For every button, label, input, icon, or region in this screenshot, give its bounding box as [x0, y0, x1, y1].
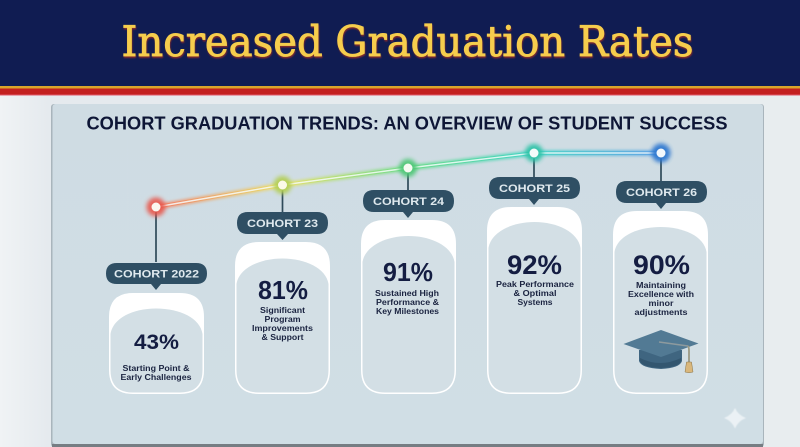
description 2022 — [120, 364, 192, 382]
description 23 — [252, 306, 314, 342]
card: cohort 25 — [487, 177, 582, 394]
header banner — [0, 0, 800, 96]
card inner 24 — [362, 236, 454, 392]
connector stems — [156, 153, 661, 262]
description 26: Excellence with — [628, 290, 694, 299]
description 25: Peak Performance — [496, 280, 575, 289]
description 23: Improvements — [252, 324, 314, 333]
description 24: Key Milestones — [376, 307, 440, 316]
card: cohort 23 — [235, 212, 330, 394]
description 23: Significant — [260, 306, 305, 315]
panel: cohort graduation trends — [51, 104, 764, 447]
description 26: minor — [648, 299, 674, 308]
value 91%: 91% — [383, 257, 433, 287]
description 24 — [375, 289, 440, 316]
icon: sparkle — [724, 408, 746, 428]
card inner 23 — [236, 258, 328, 392]
card inner 25 — [488, 222, 580, 392]
description 26 — [628, 281, 694, 317]
value 92%: 92% — [507, 250, 562, 280]
label pill 23 — [237, 212, 328, 240]
card: cohort 26 — [613, 181, 708, 394]
card shape 25 — [487, 207, 582, 394]
trend node: 23 — [274, 176, 292, 194]
description 2022: Starting Point & — [122, 364, 190, 373]
description 25 — [496, 280, 575, 307]
value 90%: 90% — [633, 250, 690, 280]
label pill 24 — [363, 190, 454, 218]
description 24: Sustained High — [375, 289, 439, 298]
panel heading: COHORT GRADUATION TRENDS: AN OVERVIEW OF STUDENT SUCCESS — [86, 112, 728, 134]
description 23: Program — [264, 315, 300, 324]
card: cohort 2022 — [106, 263, 207, 394]
value 81%: 81% — [258, 275, 308, 305]
label pill 26: COHORT 26 — [626, 187, 697, 199]
label pill 23: COHORT 23 — [247, 218, 318, 230]
trend node: 24 — [399, 159, 417, 177]
card inner 2022 — [110, 308, 202, 392]
label pill 24: COHORT 24 — [373, 196, 445, 208]
card shape 24 — [361, 220, 456, 394]
card shape 23 — [235, 242, 330, 394]
description 24: Performance & — [376, 298, 439, 307]
trend node: 26 — [652, 144, 670, 162]
description 23: & Support — [262, 333, 304, 342]
description 2022: Early Challenges — [120, 373, 192, 382]
label pill 25 — [489, 177, 580, 205]
trend node: 2022 — [146, 198, 166, 216]
description 25: & Optimal — [514, 289, 556, 298]
label pill 26 — [616, 181, 707, 209]
trend node: 25 — [525, 144, 543, 162]
card: cohort 24 — [361, 190, 456, 394]
title: Increased Graduation Rates — [122, 18, 694, 67]
card inner 26 — [614, 227, 706, 392]
description 26: Maintaining — [636, 281, 686, 290]
icon: graduation cap — [624, 330, 698, 373]
description 25: Systems — [518, 298, 553, 307]
trend line — [156, 153, 661, 207]
label pill 2022: COHORT 2022 — [114, 268, 199, 280]
description 26: adjustments — [634, 308, 688, 317]
label pill 25: COHORT 25 — [499, 183, 570, 195]
value 43%: 43% — [134, 331, 179, 354]
card shape 26 — [613, 211, 708, 394]
card shape 2022 — [109, 293, 204, 394]
